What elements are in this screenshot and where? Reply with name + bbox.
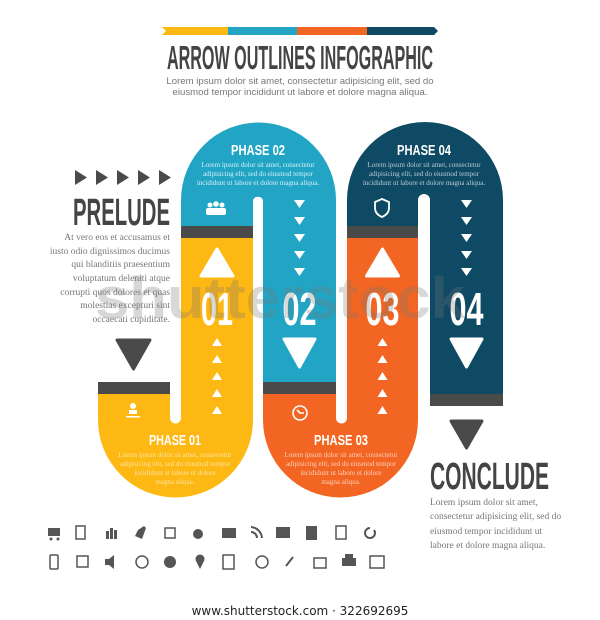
phase 02 blue: 02 xyxy=(282,283,316,335)
prelude text: At vero eos et accusamus et xyxy=(64,233,170,243)
phase 04 dark xyxy=(347,122,503,406)
phase 04 dark: Lorem ipsum dolor sit amet, consectetur xyxy=(367,161,481,169)
phase 03 orange: 03 xyxy=(366,283,400,335)
prelude text: iusto odio dignissimos ducimus xyxy=(50,247,170,257)
phase 01 yellow: Lorem ipsum dolor sit amet, consectetur xyxy=(118,451,232,459)
prelude text: corrupti quos dolores et quas xyxy=(60,288,170,298)
phase 03 orange xyxy=(263,226,418,498)
prelude down arrow xyxy=(117,340,150,369)
phase 02 blue: adipisicing elit, sed do eiusmod tempor xyxy=(203,170,314,178)
phase 02 blue xyxy=(181,122,336,394)
conclude text: eiusmod tempor incididunt ut xyxy=(430,527,543,537)
icon row 2 xyxy=(50,554,384,569)
phase 02 blue: incididunt ut labore et dolore magna aliqua. xyxy=(197,179,319,187)
phase 01 yellow: adipisicing elit, sed do eiusmod tempor xyxy=(120,460,231,468)
prelude text: occaecati cupiditate. xyxy=(92,315,170,325)
phase 01 yellow xyxy=(98,226,253,498)
phase 03 orange: Lorem ipsum dolor sit amet, consectetur xyxy=(284,451,398,459)
top color bar xyxy=(162,27,438,35)
prelude text: voluptatum deleniti atque xyxy=(73,274,170,284)
phase 01 yellow: PHASE 01 xyxy=(149,432,201,449)
watermark: shutterstock xyxy=(95,266,466,331)
prelude heading: PRELUDE xyxy=(73,192,170,234)
subtitle: eiusmod tempor incididunt ut labore et dolore magna aliqua. xyxy=(173,87,427,98)
conclude arrow xyxy=(451,421,482,448)
phase 04 dark: PHASE 04 xyxy=(397,142,451,159)
prelude arrows xyxy=(75,170,171,185)
subtitle: Lorem ipsum dolor sit amet, consectetur adipisicing elit, sed do xyxy=(166,76,434,87)
phase 03 orange: incididunt ut labore et dolore xyxy=(300,469,382,477)
phase 01 yellow: 01 xyxy=(201,283,233,335)
prelude text xyxy=(50,233,171,325)
prelude text: molestias excepturi sint xyxy=(80,301,170,311)
phase 01 yellow: magna aliqua. xyxy=(155,478,195,486)
phase 03 orange: adipisicing elit, sed do eiusmod tempor xyxy=(286,460,397,468)
phase 01 yellow: incididunt ut labore et dolore xyxy=(134,469,216,477)
icon row 1 xyxy=(48,526,375,540)
footer: www.shutterstock.com · 322692695 xyxy=(192,604,408,618)
phase 04 dark: adipisicing elit, sed do eiusmod tempor xyxy=(369,170,480,178)
subtitle xyxy=(166,76,434,98)
conclude text: labore et dolore magna aliqua. xyxy=(430,541,545,551)
phase 02 blue: PHASE 02 xyxy=(231,142,285,159)
conclude text: Lorem ipsum dolor sit amet, xyxy=(430,498,538,508)
phase 03 orange: magna aliqua. xyxy=(321,478,361,486)
prelude text: qui blanditiis praesentium xyxy=(71,260,171,270)
phase 02 blue: Lorem ipsum dolor sit amet, consectetur xyxy=(201,161,315,169)
phase 04 dark: incididunt ut labore et dolore magna aliqua. xyxy=(363,179,485,187)
phase 03 orange: PHASE 03 xyxy=(314,432,368,449)
phase 04 dark: 04 xyxy=(450,283,484,335)
conclude text: consectetur adipisicing elit, sed do xyxy=(430,512,561,522)
conclude text xyxy=(430,498,561,551)
